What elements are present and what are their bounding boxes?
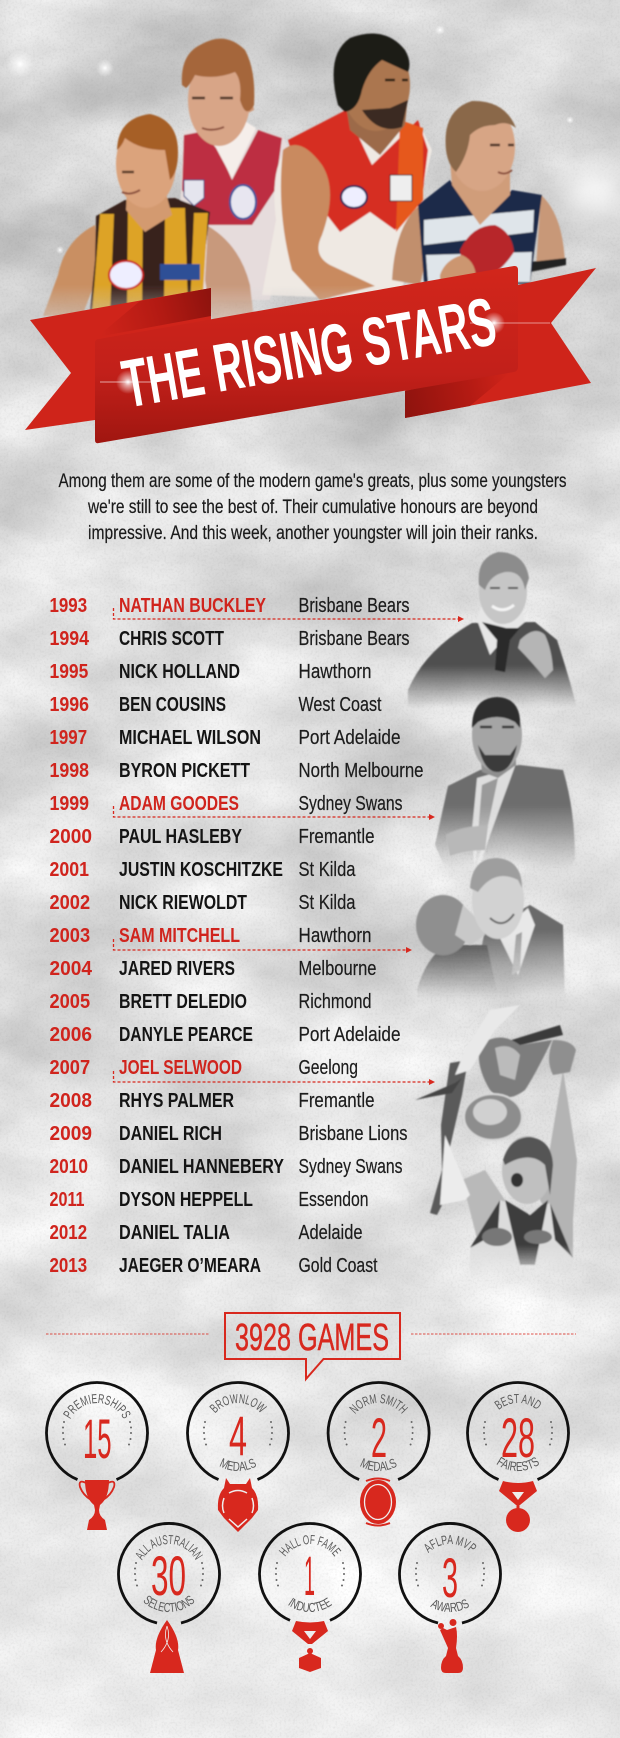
row 2011: Essendon: [298, 1188, 368, 1211]
photo: Joel Selwood with premiership cup: [415, 1005, 577, 1280]
icon: Hall of Fame medal: [292, 1621, 328, 1672]
stat: All Australian selections: ALL AUSTRALIAN: [136, 1535, 203, 1560]
icon: player statuette: [438, 1619, 463, 1673]
player: Hawthorn guernsey: [43, 114, 254, 320]
icon: Norm Smith medal: [360, 1478, 396, 1526]
row 2003: SAM MITCHELL: [119, 924, 240, 947]
row 2010: Sydney Swans: [298, 1155, 402, 1178]
stat: AFLPA MVP awards: AWARDS: [430, 1599, 469, 1612]
stat: best and fairests: FAIRESTS: [496, 1456, 539, 1472]
row 2006: [50, 1023, 400, 1046]
stat: AFLPA MVP awards: AFLPA MVP: [424, 1535, 476, 1553]
row 1998: 1998: [50, 759, 89, 782]
ribbon fold shadow right: [405, 366, 518, 418]
icon: All Australian trophy: [150, 1620, 184, 1673]
row 2002: St Kilda: [298, 891, 356, 914]
row 2012: [50, 1221, 362, 1244]
row 1999: 1999: [50, 792, 89, 815]
stat: Hall of Fame inductee: INDUCTEE: [288, 1597, 332, 1612]
row 1993: [50, 594, 410, 617]
row 2007: JOEL SELWOOD: [119, 1056, 242, 1079]
row 2006: 2006: [50, 1023, 92, 1046]
ribbon left tail: [25, 288, 211, 430]
row 2013: [50, 1254, 378, 1277]
row 2002: NICK RIEWOLDT: [119, 891, 247, 914]
stat: Hall of Fame inductee: 1: [304, 1544, 315, 1607]
row 1996: 1996: [50, 693, 89, 716]
row 2011: 2011: [50, 1188, 84, 1211]
row 2012: DANIEL TALIA: [119, 1221, 230, 1244]
row 2005: [50, 990, 372, 1013]
row 2010: 2010: [50, 1155, 88, 1178]
row 2004: [50, 957, 376, 980]
row 2009: DANIEL RICH: [119, 1122, 222, 1145]
row 2012: 2012: [50, 1221, 87, 1244]
ribbon right tail: [405, 268, 596, 418]
player: Sydney Swans guernsey: [262, 34, 432, 300]
row 2005: Richmond: [298, 990, 372, 1013]
photo: Nathan Buckley: [408, 552, 578, 716]
callout: 3928 games: 3928 GAMES: [235, 1317, 389, 1359]
row 2007: Geelong: [298, 1056, 358, 1079]
row 2008: 2008: [50, 1089, 92, 1112]
row 2004: Melbourne: [298, 957, 376, 980]
row 2011: DYSON HEPPELL: [119, 1188, 253, 1211]
row 1995: 1995: [50, 660, 88, 683]
stat: Hall of Fame inductee: HALL OF FAME: [278, 1535, 342, 1557]
photo: Sam Mitchell: [416, 858, 565, 1005]
row 2007: 2007: [50, 1056, 90, 1079]
stat: All Australian selections: 30: [151, 1544, 186, 1607]
stat: AFLPA MVP awards: 3: [442, 1546, 458, 1609]
row 2008: RHYS PALMER: [119, 1089, 234, 1112]
row 2002: [50, 891, 356, 914]
row 1995: [50, 660, 372, 683]
row 2013: Gold Coast: [298, 1254, 378, 1277]
player: red and white guernsey, back left: [180, 39, 290, 300]
photo: Adam Goodes: [435, 697, 575, 880]
row 2005: BRETT DELEDIO: [119, 990, 247, 1013]
row 2009: 2009: [50, 1122, 92, 1145]
row 2006: Port Adelaide: [298, 1023, 400, 1046]
title glints: [100, 312, 550, 394]
player: Geelong guernsey with red football: [392, 101, 566, 285]
row 1996: [50, 693, 382, 716]
row 2006: DANYLE PEARCE: [119, 1023, 253, 1046]
winners list: [50, 594, 424, 1277]
stat: Norm Smith medals: 2: [371, 1406, 387, 1469]
stat: Brownlow medals: [186, 1381, 290, 1532]
row 2004: JARED RIVERS: [119, 957, 235, 980]
row 2003: 2003: [50, 924, 90, 947]
row 2003: [50, 924, 372, 947]
row 1993: 1993: [50, 594, 87, 617]
icon: trophy: [80, 1480, 114, 1530]
stat: best and fairests: BEST AND: [494, 1394, 541, 1410]
row 1997: 1997: [50, 726, 87, 749]
header player photos: [43, 34, 566, 320]
row 2008: Fremantle: [298, 1089, 374, 1112]
row 2012: Adelaide: [298, 1221, 362, 1244]
row 1994: Brisbane Bears: [298, 627, 410, 650]
arrow: Sam Mitchell to photo: [114, 939, 412, 953]
row 2011: [50, 1188, 368, 1211]
row 1998: North Melbourne: [298, 759, 424, 782]
stat: All Australian selections: [117, 1522, 221, 1673]
ribbon fold shadow left: [97, 288, 211, 337]
row 1994: 1994: [50, 627, 90, 650]
row 2003: Hawthorn: [298, 924, 372, 947]
stat: All Australian selections: SELECTIONS: [144, 1596, 194, 1612]
stat: premierships: [45, 1381, 149, 1530]
row 2010: [50, 1155, 402, 1178]
row 1999: Sydney Swans: [298, 792, 402, 815]
stat: Hall of Fame inductee: [258, 1522, 362, 1672]
stat: Brownlow medals: 4: [229, 1404, 247, 1467]
row 1993: NATHAN BUCKLEY: [119, 594, 266, 617]
icon: medal: [499, 1481, 537, 1532]
row 2000: [50, 825, 374, 848]
row 1998: [50, 759, 424, 782]
row 2001: 2001: [50, 858, 89, 881]
stat: Brownlow medals: BROWNLOW: [209, 1394, 267, 1413]
callout: 3928 games: [46, 1313, 576, 1379]
row 1998: BYRON PICKETT: [119, 759, 250, 782]
row 2013: JAEGER O’MEARA: [119, 1254, 261, 1277]
row 1995: NICK HOLLAND: [119, 660, 240, 683]
stat: Norm Smith medals: MEDALS: [360, 1458, 396, 1472]
stat: Norm Smith medals: [326, 1381, 430, 1526]
row 1993: Brisbane Bears: [298, 594, 410, 617]
row 1999: ADAM GOODES: [119, 792, 239, 815]
row 2008: [50, 1089, 374, 1112]
stat: best and fairests: [466, 1381, 570, 1532]
arrow: Nathan Buckley to photo: [114, 608, 464, 622]
row 2010: DANIEL HANNEBERY: [119, 1155, 284, 1178]
row 1999: [50, 792, 402, 815]
stat: best and fairests: 28: [501, 1406, 535, 1469]
row 2005: 2005: [50, 990, 90, 1013]
intro text: impressive. And this week, another youngster will join their ranks.: [88, 523, 538, 544]
row 1994: [50, 627, 410, 650]
title ribbon: [25, 266, 596, 443]
intro text: [58, 471, 566, 544]
ribbon front panel: [95, 266, 518, 443]
row 1996: West Coast: [298, 693, 382, 716]
stat: AFLPA MVP awards: [398, 1522, 502, 1673]
row 2002: 2002: [50, 891, 90, 914]
row 2009: [50, 1122, 408, 1145]
stat: premierships: PREMIERSHIPS: [63, 1394, 130, 1419]
row 2004: 2004: [50, 957, 93, 980]
row 1994: CHRIS SCOTT: [119, 627, 224, 650]
row 2000: PAUL HASLEBY: [119, 825, 242, 848]
row 2007: [50, 1056, 358, 1079]
row 2000: Fremantle: [298, 825, 374, 848]
arrow: Adam Goodes to photo: [114, 806, 435, 820]
stat: premierships: 15: [83, 1407, 112, 1470]
row 1997: Port Adelaide: [298, 726, 400, 749]
row 1997: [50, 726, 400, 749]
row 2013: 2013: [50, 1254, 87, 1277]
row 2001: [50, 858, 356, 881]
stat: Norm Smith medals: NORM SMITH: [349, 1394, 408, 1414]
row 1995: Hawthorn: [298, 660, 372, 683]
icon: Brownlow medal: [218, 1478, 258, 1532]
row 2000: 2000: [50, 825, 92, 848]
stat: Brownlow medals: MEDALS: [220, 1458, 256, 1472]
row 1996: BEN COUSINS: [119, 693, 226, 716]
row 1997: MICHAEL WILSON: [119, 726, 261, 749]
row 2001: St Kilda: [298, 858, 356, 881]
row 2001: JUSTIN KOSCHITZKE: [119, 858, 283, 881]
arrow: Joel Selwood to photo: [114, 1071, 435, 1085]
row 2009: Brisbane Lions: [298, 1122, 408, 1145]
